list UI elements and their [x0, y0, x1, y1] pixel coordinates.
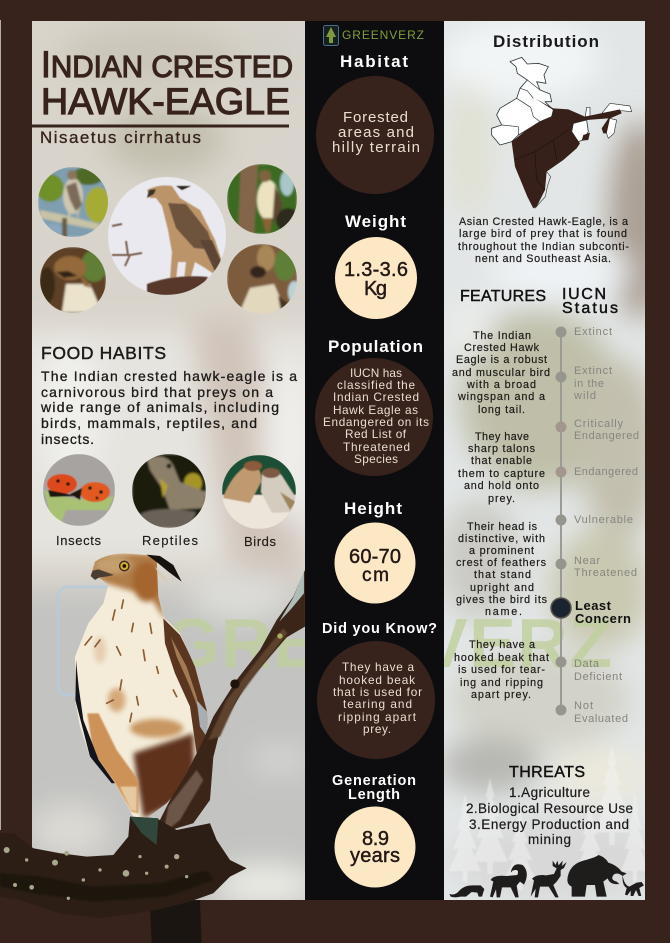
chart: IUCN status timeline: Evaluated [574, 713, 628, 725]
text: distribution description: Asian Crested Hawk-Eagle, is a [459, 216, 628, 228]
photo: reptiles [132, 454, 206, 528]
text: features list: ing and ripping [460, 677, 543, 689]
fact: did you know: Did you Know? [322, 621, 437, 637]
fact: generation length: Generation [332, 773, 416, 789]
fact: habitat: Forested [343, 109, 408, 126]
subtitle: scientific name: Nisaetus cirrhatus [40, 128, 201, 147]
photo: birds [222, 455, 296, 529]
fact: height: cm [362, 565, 389, 586]
text: food habits description: insects. [41, 431, 94, 447]
text: features list: wingspan and a [457, 391, 545, 403]
text: features list [452, 330, 550, 701]
text: distribution description: nent and Southeast Asia. [475, 253, 611, 265]
labels: prey captions: Birds [244, 534, 276, 549]
heading: threats: THREATS [509, 764, 585, 781]
chart: IUCN status timeline: Not [574, 700, 593, 712]
text: features list: Crested Hawk [464, 342, 540, 354]
text: features list: long tail. [478, 404, 525, 416]
photo: insects [43, 454, 115, 526]
text: features list: a prominent [469, 545, 534, 557]
chart: IUCN status timeline: Extinct [574, 326, 612, 338]
chart: IUCN status timeline: in the [574, 378, 604, 390]
text: threats list: 1.Agriculture [509, 785, 590, 800]
heading: title: INDIAN CRESTED [41, 44, 293, 85]
chart: IUCN status timeline: Endangered [574, 466, 638, 478]
photo: perched hawk-eagle top left [38, 167, 108, 237]
fact: did you know: that is used for [333, 685, 422, 699]
icons: wildlife silhouettes [449, 855, 644, 897]
text: features list: sharp talons [468, 443, 536, 455]
fact: height [334, 499, 416, 604]
icon: deer [531, 861, 567, 897]
text: features list: that stand [474, 569, 531, 581]
fact: did you know [317, 621, 437, 759]
text: distribution description: throughout the Indian subconti- [458, 241, 629, 253]
text: features list: They have [475, 431, 529, 443]
fact: generation length [332, 773, 416, 888]
photo: portrait bottom left [39, 247, 107, 313]
photo: hawk-eagle top right [227, 164, 300, 234]
labels: prey captions [56, 533, 276, 549]
fact: population: IUCN has [350, 366, 402, 380]
fact: generation length: 8.9 [362, 828, 389, 850]
fact: population: Threatened [343, 440, 410, 454]
icon: elephant [567, 855, 627, 897]
heading: title [32, 44, 293, 128]
chart: IUCN status timeline: Concern [575, 611, 631, 626]
trees backdrop [449, 745, 649, 890]
chart: IUCN status timeline: Extinct [574, 365, 612, 377]
text: features list: hooked beak that [454, 652, 549, 664]
fact: population: Indian Crested [333, 390, 419, 404]
text: features list: prey. [488, 493, 515, 505]
text: food habits description: The Indian crested hawk-eagle is a [41, 368, 297, 384]
fact: did you know: prey. [363, 722, 391, 736]
text: food habits description [40, 368, 297, 447]
bird: body [73, 550, 213, 823]
chart: IUCN status timeline: Threatened [574, 567, 637, 579]
heading: IUCN status: IUCN [562, 286, 606, 303]
fact: habitat: Habitat [340, 52, 408, 71]
chart: IUCN status timeline: wild [573, 390, 596, 402]
labels: prey captions: Insects [56, 533, 102, 548]
fact: did you know: They have a [342, 660, 414, 674]
text: features list: apart prey. [471, 689, 531, 701]
text: threats list [466, 785, 633, 847]
text: food habits description: birds, mammals, reptiles, and [41, 415, 257, 431]
chart: IUCN status timeline: Least [575, 598, 612, 613]
heading: food habits: FOOD HABITS [41, 343, 166, 363]
text: features list: They have a [469, 639, 535, 651]
fact: habitat: hilly terrain [332, 139, 420, 156]
chart: IUCN status timeline: Vulnerable [574, 514, 633, 526]
text: features list: distinctive, with [458, 533, 545, 545]
fact: population: Hawk Eagle as [333, 403, 418, 417]
text: features list: with a broad [466, 379, 536, 391]
logo: Greenverz [324, 26, 424, 46]
heading: features: FEATURES [460, 288, 546, 305]
fact: population: Red List of [345, 427, 407, 441]
text: distribution description: large bird of prey that is found [459, 228, 627, 240]
text: features list: that enable [471, 455, 532, 467]
chart: IUCN status timeline: Deficient [574, 671, 622, 683]
text: features list: and muscular bird [452, 367, 550, 379]
panel: right background [444, 21, 645, 900]
text: food habits description: wide range of animals, including [40, 399, 279, 415]
text: features list: The Indian [473, 330, 531, 342]
illustration: main hawk-eagle on branch [0, 550, 305, 943]
branch: upper limb [160, 570, 305, 833]
fact: generation length: Length [348, 787, 400, 803]
text: features list: and hold onto [464, 480, 539, 492]
fact: population: Endangered on its [323, 415, 429, 429]
text: distribution description [458, 216, 629, 265]
text: features list: Eagle is a robust [456, 354, 547, 366]
fact: habitat: areas and [338, 124, 414, 141]
fact: population: Population [328, 337, 423, 356]
fact: habitat [316, 52, 434, 194]
chart: IUCN status timeline: Endangered [574, 430, 639, 442]
text: threats list: 2.Biological Resource Use [466, 801, 633, 816]
fact: population [315, 337, 433, 476]
text: features list: upright and [470, 582, 534, 594]
icon: monkey [622, 875, 644, 896]
heading: distribution: Distribution [493, 32, 599, 51]
chart: IUCN status timeline: Near [574, 555, 600, 567]
panel: left background [32, 21, 305, 900]
bird: beak and eye [91, 561, 130, 580]
text: food habits description: carnivorous bird that preys on a [41, 384, 273, 400]
panel: centre facts [305, 21, 444, 900]
fact: population: classified the [337, 378, 415, 392]
fact: did you know: ripping apart [338, 710, 417, 724]
text: threats list: 3.Energy Production and [469, 817, 629, 832]
photo: portrait bottom right [227, 244, 300, 316]
text: threats list: mining [528, 832, 571, 847]
logo: Greenverz: GREENVERZ [342, 28, 424, 42]
text: features list: gives the bird its [456, 594, 548, 606]
branch: lower limb and trunk [0, 817, 247, 943]
bird: crest feathers [147, 555, 182, 585]
watermark: logo and GREENVERZ: GREENVERZ [165, 604, 612, 682]
text: features list: is used for tear- [458, 664, 545, 676]
map: India distribution [492, 57, 632, 208]
text: features list: Their head is [467, 521, 538, 533]
icon: ibex [490, 864, 527, 897]
fact: weight: Kg [364, 278, 387, 300]
photo: hawk-eagle centre [108, 177, 226, 295]
chart: IUCN status timeline: Critically [574, 418, 624, 430]
labels: prey captions: Reptiles [142, 533, 198, 548]
watermark: logo and GREENVERZ [58, 587, 612, 695]
fact: generation length: years [350, 845, 400, 867]
fact: population: Species [354, 452, 398, 466]
fact: weight: Weight [345, 212, 406, 231]
heading: IUCN status: Status [562, 300, 618, 317]
heading: IUCN status [562, 286, 618, 317]
fact: height: 60-70 [349, 546, 401, 568]
text: features list: them to capture [458, 468, 545, 480]
fact: did you know: hooked beak [339, 673, 415, 687]
chart: IUCN status timeline: Data [574, 658, 600, 670]
heading: title: HAWK-EAGLE [41, 81, 290, 122]
fact: did you know: tearing and [343, 697, 412, 711]
text: features list: crest of feathers [456, 557, 547, 569]
fact: weight: 1.3-3.6 [344, 259, 408, 281]
icon: leopard [449, 885, 484, 897]
chart: IUCN status timeline [551, 326, 639, 725]
text: features list: name. [485, 606, 522, 618]
fact: weight [335, 212, 417, 319]
fact: height: Height [344, 499, 402, 518]
